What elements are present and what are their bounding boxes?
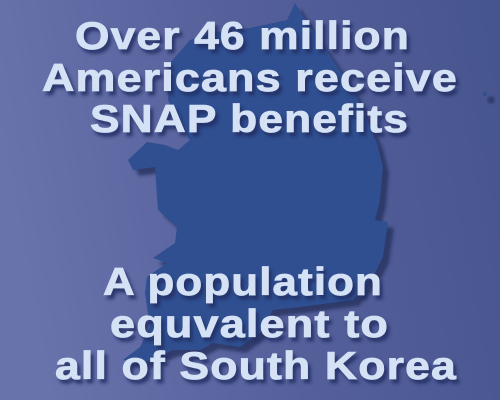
heading: SNAP statistic xyxy=(42,15,458,141)
text: South Korea comparison: equvalent to xyxy=(110,303,389,346)
text shadow: Over 46 million xyxy=(78,19,413,62)
island: Ulleungdo xyxy=(483,92,494,104)
heading: SNAP statistic: SNAP benefits xyxy=(90,98,409,141)
text shadow: equvalent to xyxy=(113,307,392,350)
heading: SNAP statistic: Americans receive xyxy=(42,57,458,100)
text: South Korea comparison: A population xyxy=(103,261,383,304)
text shadow: SNAP benefits xyxy=(93,102,412,145)
text shadow: all of South Korea xyxy=(58,349,460,392)
text: South Korea comparison xyxy=(55,261,457,388)
map of South Korea xyxy=(123,3,494,369)
text shadow xyxy=(45,19,461,392)
heading: SNAP statistic: Over 46 million xyxy=(75,15,410,58)
text: South Korea comparison: all of South Korea xyxy=(55,345,457,388)
text shadow: Americans receive xyxy=(45,61,461,104)
text shadow: A population xyxy=(106,265,386,308)
